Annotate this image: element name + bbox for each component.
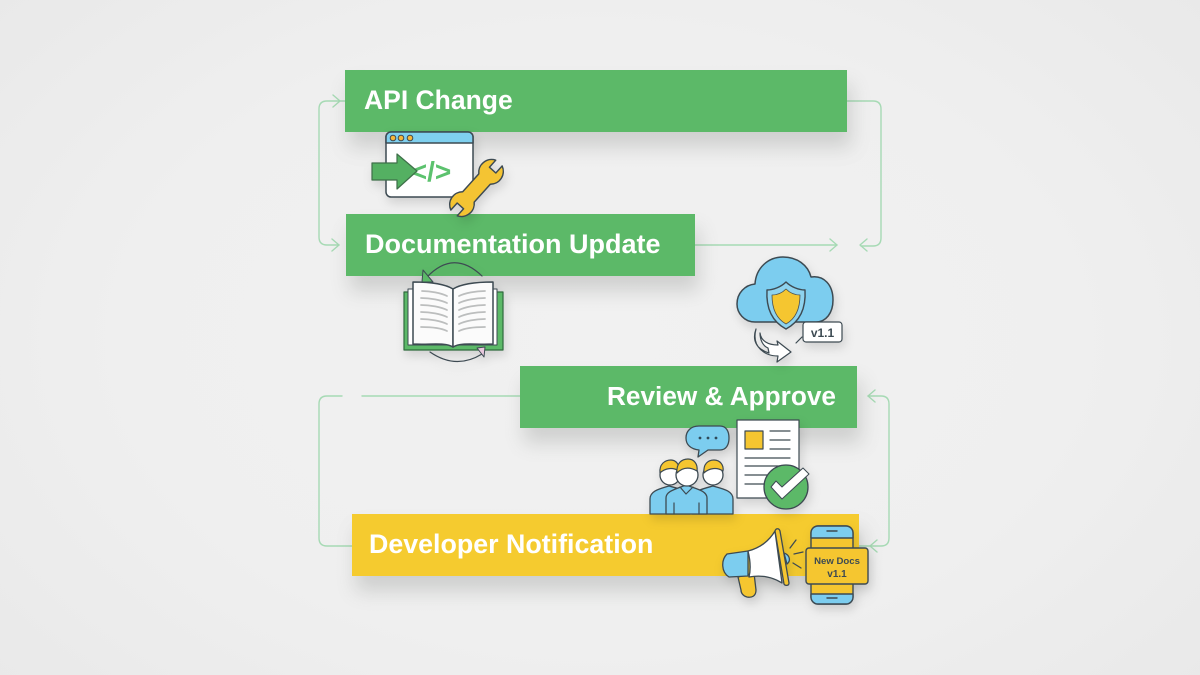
- sync arrow: [755, 329, 791, 362]
- arrow: Review and Approve to Developer Notification left loop: [319, 396, 520, 546]
- version tag: [803, 322, 842, 342]
- step bar: Review and Approve: Review & Approve: [607, 381, 836, 411]
- step bar: Review and Approve: [520, 366, 857, 428]
- arrow: API Change left loop: [319, 95, 345, 251]
- speech bubble: [686, 426, 729, 457]
- arrow: Developer Notification to Review and Approve right loop: [859, 390, 889, 552]
- icon: cloud with shield and version tag: [737, 257, 842, 362]
- check badge: [764, 465, 808, 509]
- arrow: Documentation Update to centre: [695, 239, 837, 251]
- step bar: Documentation Update: [346, 214, 695, 276]
- icon: phone with new docs notice: New Docs: [814, 556, 860, 567]
- step bar: API Change: API Change: [364, 85, 513, 115]
- browser window: </>: [411, 156, 451, 187]
- icon: open book with circular arrows: [404, 263, 503, 362]
- wrench: [445, 155, 508, 221]
- icon: cloud with shield and version tag: v1.1: [811, 326, 835, 340]
- icon: code window with arrow and wrench: [372, 132, 508, 221]
- notice card: [806, 548, 868, 584]
- step bar: API Change: [345, 70, 847, 132]
- person centre: [666, 485, 707, 514]
- person right: [692, 486, 733, 514]
- shield: [767, 282, 805, 329]
- document: [737, 420, 799, 498]
- step bar: Developer Notification: Developer Notification: [369, 529, 653, 559]
- step bar: Documentation Update: Documentation Update: [365, 229, 661, 259]
- green arrow: [372, 154, 417, 189]
- arrow: API Change to Documentation Update right loop: [847, 101, 881, 251]
- step bar: Developer Notification: [352, 514, 859, 576]
- icon: team reviewing approved document: [650, 420, 809, 514]
- icon: phone with new docs notice: [806, 526, 868, 604]
- person left: [650, 486, 690, 514]
- icon: phone with new docs notice: v1.1: [827, 569, 847, 580]
- icon: megaphone: [723, 529, 803, 597]
